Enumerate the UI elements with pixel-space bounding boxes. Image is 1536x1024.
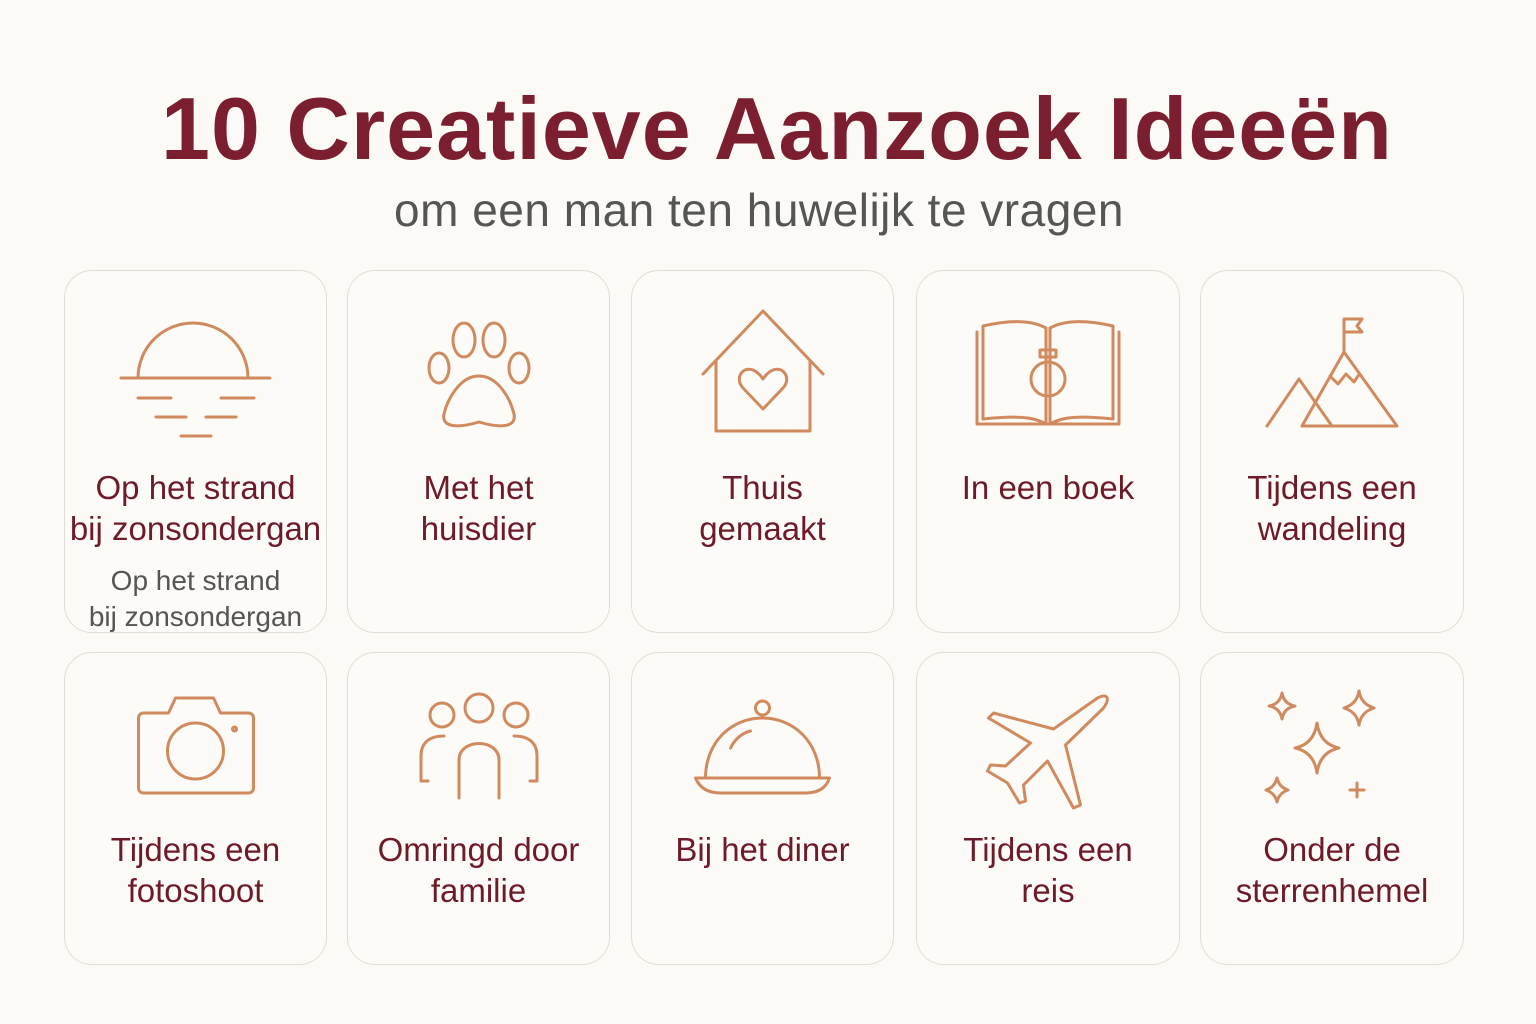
label: gemaakt — [699, 510, 826, 547]
label — [963, 831, 1133, 909]
label: huisdier — [421, 510, 536, 547]
sublabel: Op het strand — [111, 565, 280, 596]
card: huisdier — [347, 270, 610, 633]
card: boek — [916, 270, 1180, 633]
label: bij zonsondergan — [70, 510, 321, 547]
subtitle: om een man ten huwelijk te vragen — [394, 184, 1124, 236]
label: Thuis — [722, 469, 803, 506]
card: strand — [64, 270, 327, 633]
icon: camera — [137, 696, 255, 794]
sublabel: bij zonsondergan — [89, 601, 302, 632]
label — [1247, 469, 1417, 547]
icon: paw — [428, 322, 530, 428]
label: fotoshoot — [128, 872, 263, 909]
icon: stars — [1264, 690, 1376, 804]
label: reis — [1021, 872, 1075, 909]
icon: people — [420, 692, 538, 800]
label: Tijdens een — [1247, 469, 1417, 506]
label: familie — [431, 872, 526, 909]
label: Op het strand — [96, 469, 295, 506]
card: reis — [916, 652, 1180, 965]
label: Met het — [423, 469, 534, 506]
label — [70, 469, 321, 547]
card: wandeling — [1200, 270, 1464, 633]
icon: mountain flag — [1265, 318, 1399, 428]
card: familie — [347, 652, 610, 965]
card: thuis — [631, 270, 894, 633]
label: Onder de — [1263, 831, 1401, 868]
icon: sunset — [120, 322, 272, 438]
icon: house heart — [701, 309, 824, 432]
label: wandeling — [1258, 510, 1406, 547]
label — [378, 831, 579, 909]
sublabel — [89, 565, 302, 632]
icon: airplane — [986, 694, 1109, 810]
label: sterrenhemel — [1236, 872, 1428, 909]
label: Tijdens een — [111, 831, 280, 868]
label — [421, 469, 536, 547]
title: 10 Creatieve Aanzoek Ideeën — [161, 79, 1393, 178]
card: sterren — [1200, 652, 1464, 965]
card: diner — [631, 652, 894, 965]
label — [111, 831, 280, 909]
label — [699, 469, 826, 547]
icon: cloche — [694, 700, 831, 794]
label — [1236, 831, 1428, 909]
label: In een boek — [962, 469, 1134, 506]
icon: book with ring — [976, 320, 1120, 426]
label: Bij het diner — [675, 831, 850, 868]
card: fotoshoot — [64, 652, 327, 965]
label: Omringd door — [378, 831, 579, 868]
label: Tijdens een — [963, 831, 1133, 868]
